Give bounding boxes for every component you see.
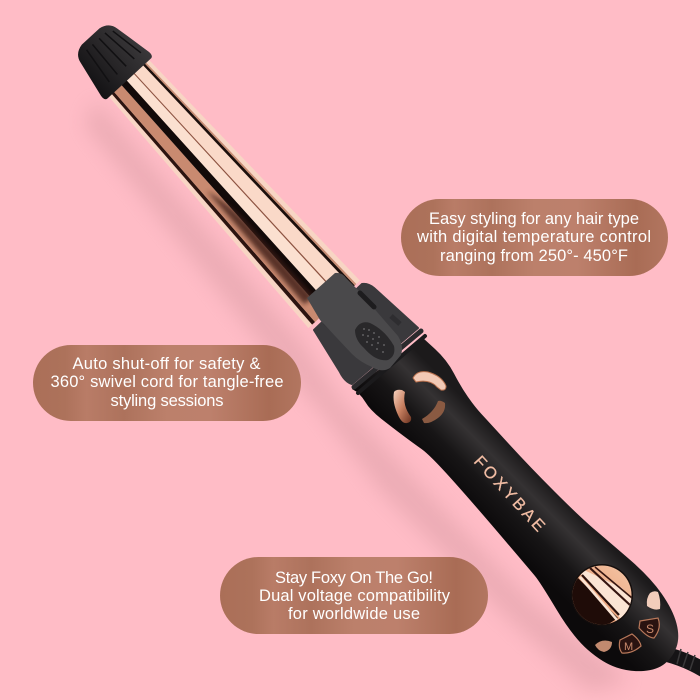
button: favourite (647, 591, 660, 610)
reflection on barrel (203, 185, 314, 305)
swivel collar (314, 284, 425, 393)
drop shadow of curling iron (85, 100, 630, 692)
callout: auto shut-off: Auto shut-off for safety & (72, 355, 260, 373)
button: oval (595, 641, 612, 652)
textured thumb button (355, 322, 394, 360)
curling iron barrel (95, 49, 360, 328)
callout: temperature control: ranging from 250°- 450°F (440, 247, 628, 265)
power cord (655, 649, 700, 670)
callout: dual voltage: Dual voltage compatibility (259, 587, 451, 605)
button: M: M (624, 641, 633, 653)
temperature and mode buttons (394, 372, 446, 423)
brand logo: FOXYBAE (470, 453, 548, 535)
callout: auto shut-off: styling sessions (110, 392, 224, 410)
control buttons (595, 591, 660, 653)
callout: dual voltage (220, 557, 488, 634)
callout: temperature control: Easy styling for any hair type (429, 210, 639, 228)
button: top arc (413, 372, 446, 390)
callout: auto shut-off: 360° swivel cord for tangle-free (50, 373, 284, 391)
button: S: S (646, 622, 654, 636)
callout: auto shut-off (33, 345, 301, 421)
callout: temperature control (401, 199, 668, 276)
callout: dual voltage: Stay Foxy On The Go! (275, 569, 433, 587)
callout: dual voltage: for worldwide use (288, 605, 420, 623)
clip lever (307, 273, 402, 370)
handle (352, 338, 678, 671)
nozzle cap (67, 14, 153, 101)
button: home arc (422, 401, 445, 423)
button: left arc (394, 390, 411, 423)
callout: temperature control: with digital temperature control (416, 228, 651, 246)
heat dial (572, 564, 633, 624)
